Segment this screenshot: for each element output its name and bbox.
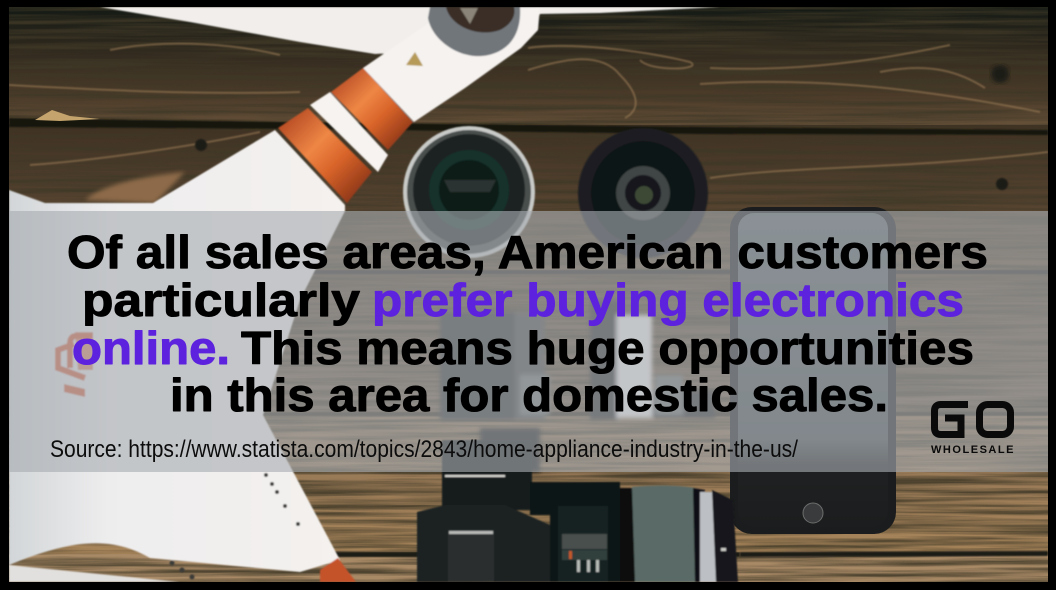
panel: translucent text band xyxy=(9,211,1048,472)
heading line 4: in this area for domestic sales. xyxy=(170,369,888,421)
logo wordmark: WHOLESALE xyxy=(931,444,1015,456)
icon: lens silver xyxy=(403,126,535,258)
source text: Source: https://www.statista.com/topics/2843/home-appliance-industry-in-the-us/ xyxy=(50,436,798,463)
icon: accessories xyxy=(440,300,715,472)
heading line 3 purple: online. xyxy=(72,322,230,374)
heading line 3 black: This means huge opportunities xyxy=(241,322,974,374)
heading line 2 purple: prefer buying electronics xyxy=(372,274,964,326)
logo mark: GO xyxy=(934,404,1010,434)
heading xyxy=(67,226,988,421)
logo: GO Wholesale xyxy=(931,404,1015,456)
heading line 1: Of all sales areas, American customers xyxy=(67,226,988,278)
icon: drone xyxy=(9,7,720,582)
icon: lens black xyxy=(578,128,708,258)
icon: camera xyxy=(417,440,738,582)
heading line 2 black: particularly xyxy=(82,274,360,326)
icon: phone xyxy=(730,207,896,534)
